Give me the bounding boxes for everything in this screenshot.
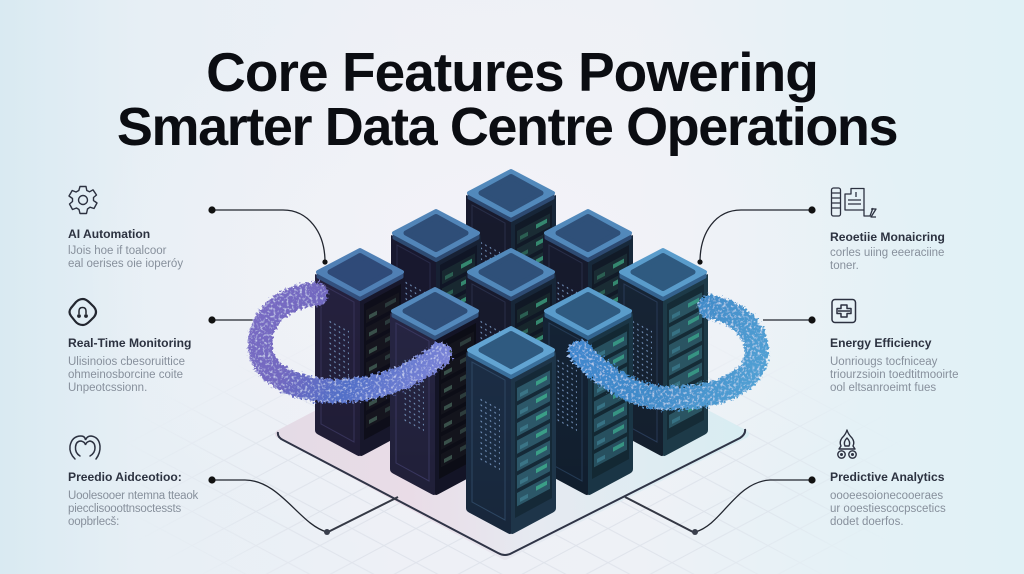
title: Core Features Powering: [206, 41, 818, 103]
platform: [278, 312, 745, 556]
feature: Predictive Automation: [68, 435, 198, 528]
feature: Real-Time Monitoring: Unpeotcssionn.: [68, 382, 147, 394]
feature: Reoetiie Monaicring: corles uiing eeeraciine: [830, 247, 944, 259]
server tower: row three left: [315, 250, 405, 456]
feature: Predictive Automation: Uoolesooer ntemna tteaok: [68, 490, 198, 502]
feature: Predictive Analytics: Predictive Analytics: [830, 470, 944, 484]
server tower: front: [466, 328, 556, 534]
feature: Predictive Automation: piecclisooottnsoctessts: [68, 503, 181, 515]
server tower: row four left: [390, 289, 480, 495]
title: Smarter Data Centre Operations: [117, 97, 897, 157]
title: [117, 41, 897, 157]
feature: Energy Efficiency: [830, 298, 958, 394]
particle ring: right: [580, 307, 757, 398]
server tower: row two right: [543, 211, 633, 417]
server tower: row four right: [543, 289, 633, 495]
illustration: server cluster on platform: [208, 169, 816, 574]
server tower: row three centre: [466, 250, 556, 456]
feature: Real-Time Monitoring: Real-Time Monitoring: [68, 336, 191, 350]
floor grid: [210, 394, 816, 574]
feature: Reoetiie Monaicring: toner.: [830, 260, 859, 272]
feature: Predictive Automation: Preedio Aidceotioo:: [68, 470, 182, 484]
feature: AI Automation: AI Automation: [68, 227, 150, 241]
feature: Energy Efficiency: triourzsioin toedtitmooirte: [830, 369, 958, 381]
icon: plus box: [831, 298, 856, 324]
feature: Predictive Analytics: ur ooestiescocpscetics: [830, 503, 946, 515]
connector: Real-Time Monitoring: [208, 316, 264, 324]
connector: Predictive left: [208, 476, 398, 535]
server tower: back: [466, 171, 556, 377]
particle ring: left: [260, 294, 440, 391]
connector: Energy Efficiency: [763, 316, 816, 324]
connector: AI Automation: [208, 206, 328, 265]
feature: Predictive Analytics: dodet doerfos.: [830, 516, 904, 528]
feature: AI Automation: lJois hoe if toalcoor: [68, 245, 166, 257]
feature: Predictive Automation: oopbrlecš:: [68, 516, 119, 528]
connector: Predictive Analytics: [625, 476, 816, 535]
connector: Monitoring right: [697, 206, 816, 265]
feature: Energy Efficiency: ool eltsanroeimt fues: [830, 382, 936, 394]
icon: gear: [68, 186, 98, 214]
icon: server and monitor: [830, 187, 877, 218]
feature: Predictive Analytics: [830, 429, 946, 528]
feature: Real-Time Monitoring: ohmeinosborcine coite: [68, 369, 183, 381]
icon: flame with dials: [837, 429, 857, 459]
icon: double loop: [69, 435, 101, 460]
feature: Predictive Analytics: oooeesoionecooeraes: [830, 490, 943, 502]
icon: monitoring badge: [68, 298, 98, 326]
feature: Real-Time Monitoring: Ulisinoios cbesoruittice: [68, 356, 185, 368]
feature: Energy Efficiency: Energy Efficiency: [830, 336, 932, 350]
feature: AI Automation: eal oerises oie ioperóy: [68, 258, 183, 270]
feature: AI Automation: [68, 186, 183, 270]
feature: Energy Efficiency: Uonriougs tocfniceay: [830, 356, 937, 368]
server tower: row two left: [391, 211, 481, 417]
feature: Reoetiie Monaicring: [830, 187, 945, 272]
feature: Real-Time Monitoring: [68, 298, 191, 394]
feature: Reoetiie Monaicring: Reoetiie Monaicring: [830, 230, 945, 244]
server tower: row three right: [618, 250, 708, 456]
